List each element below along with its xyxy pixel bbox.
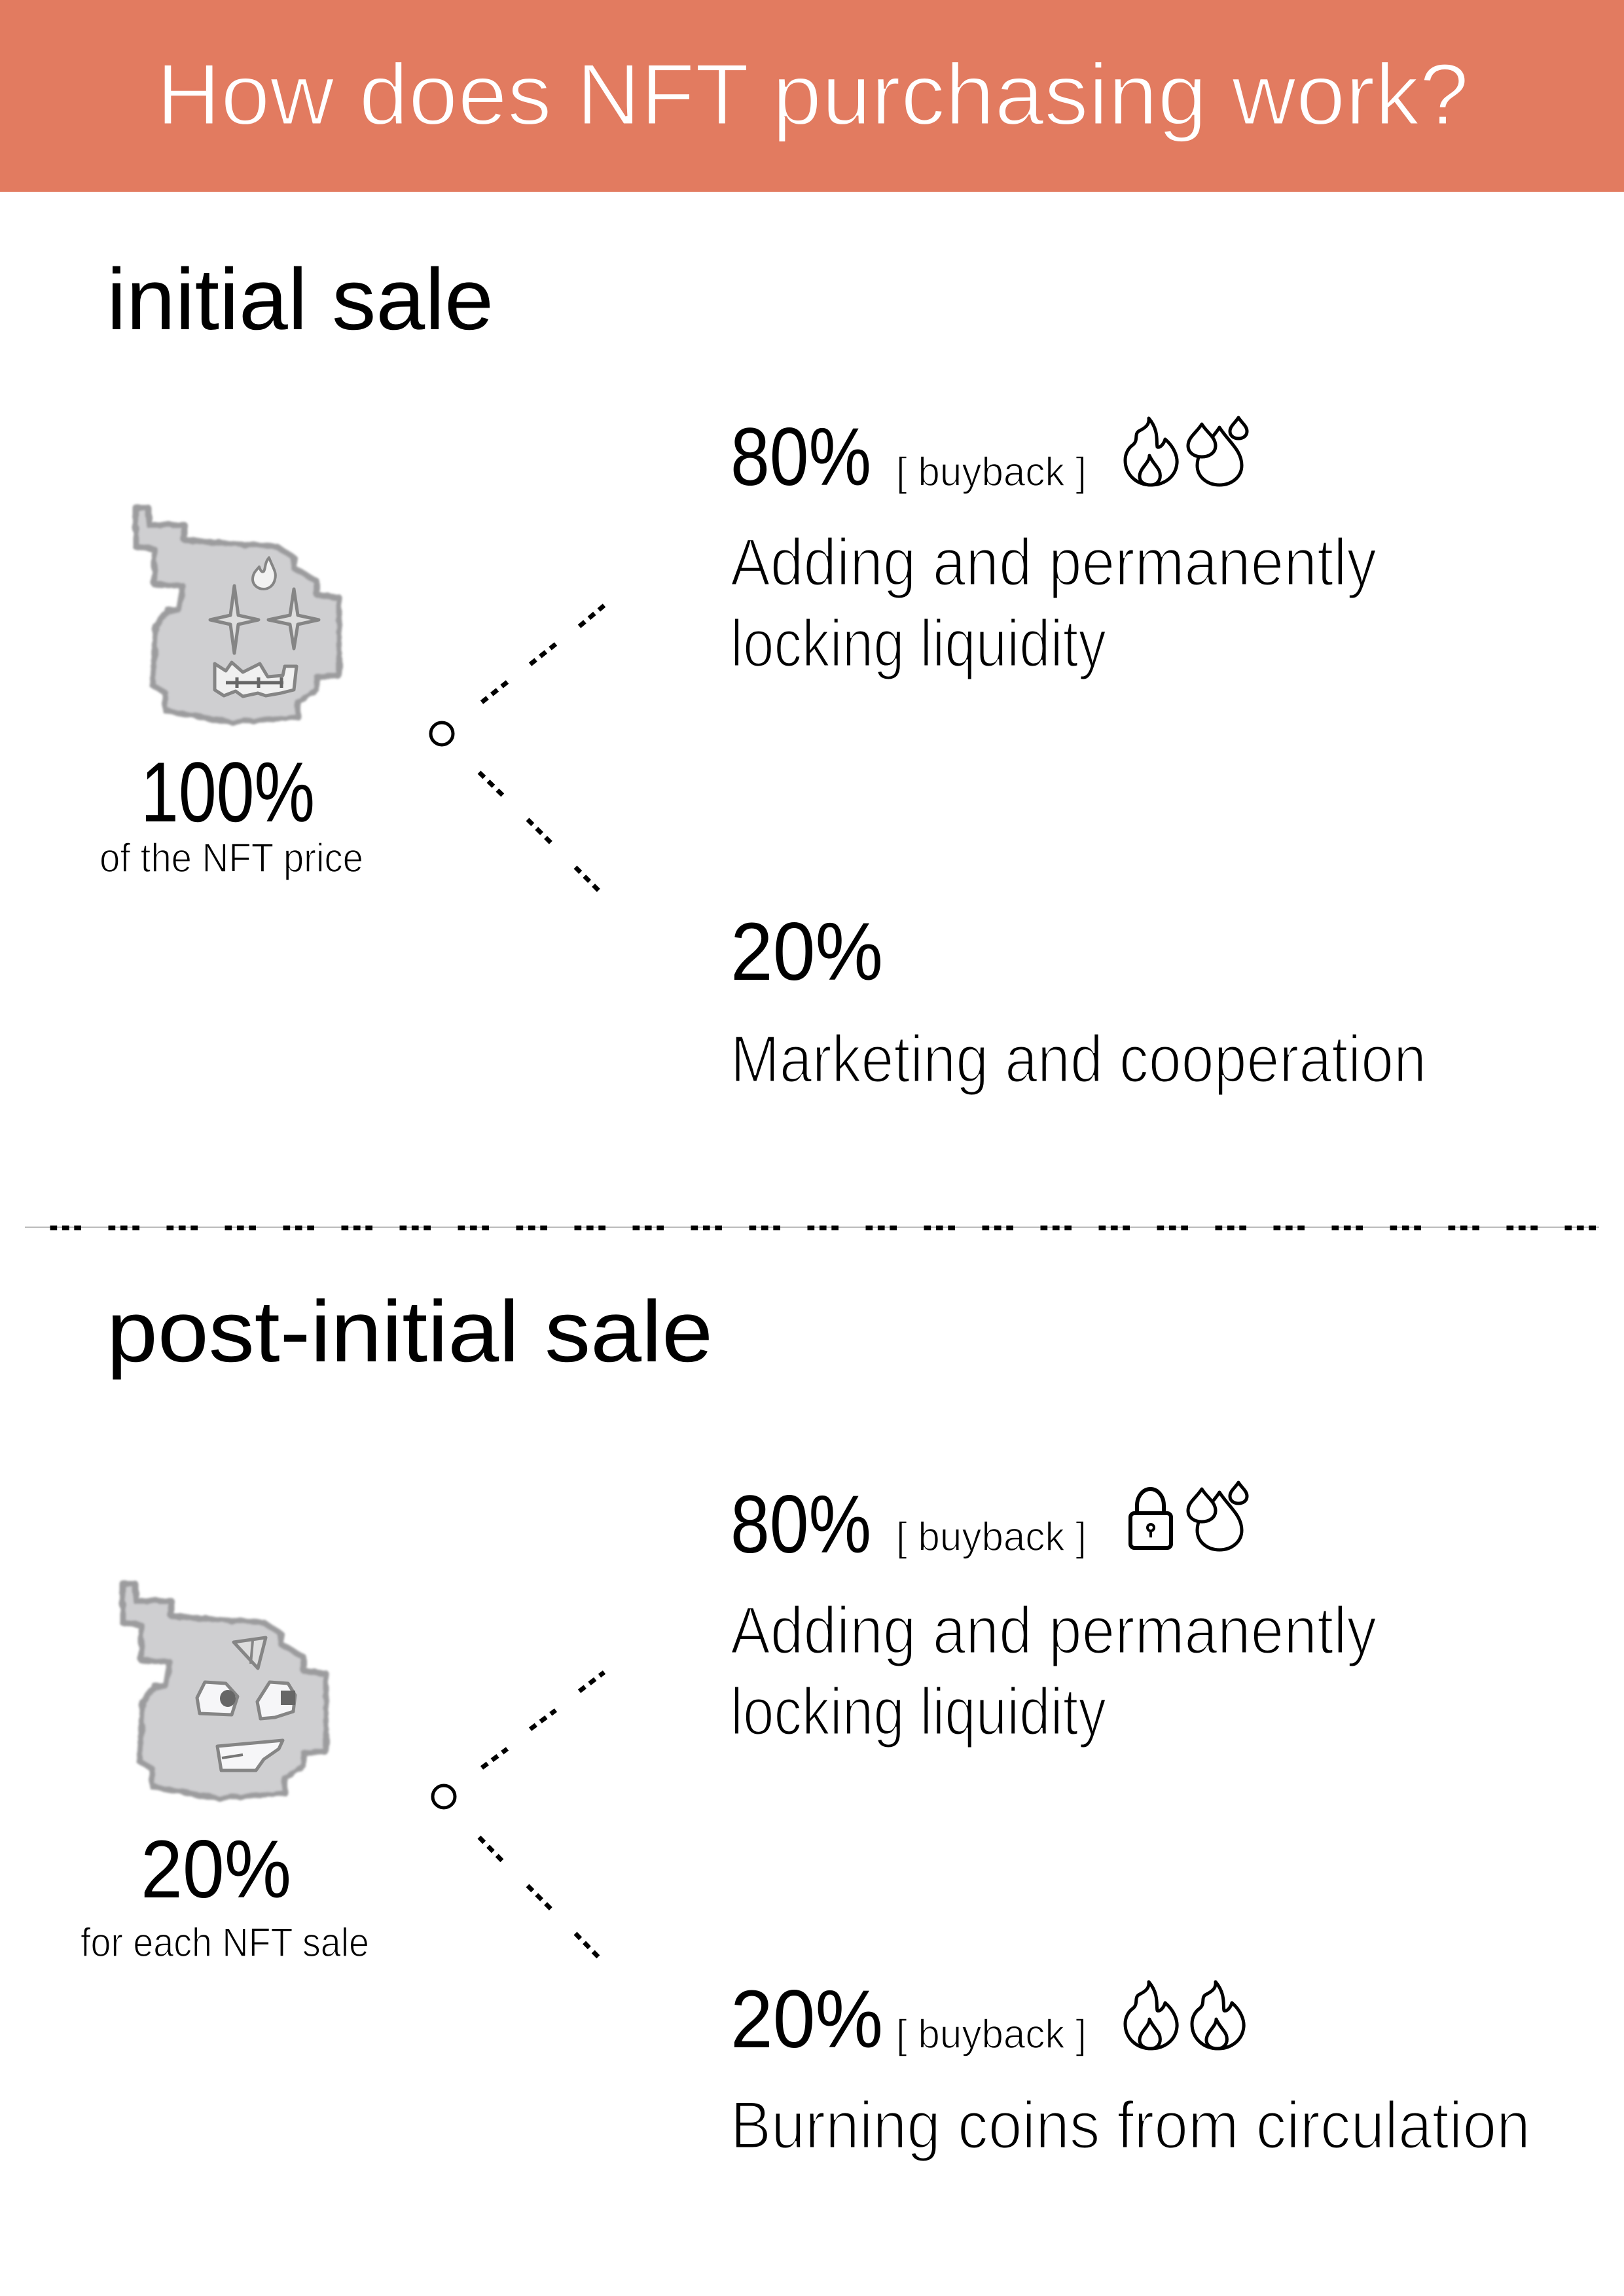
icon: liquidity drops (1188, 418, 1247, 485)
icon: fire (1192, 1982, 1244, 2049)
mascot: sparkle-eyed token (135, 508, 339, 723)
icon: padlock (1130, 1489, 1171, 1548)
description: adding and permanently locking liquidity: Adding and permanently (731, 525, 1377, 600)
mascot: wide-eyed token (122, 1584, 326, 1799)
split connector: initial sale (431, 605, 604, 891)
title: How does NFT purchasing work? (156, 46, 1469, 143)
description: adding and permanently locking liquidity: locking liquidity (731, 606, 1106, 681)
panel: post-initial sale source (81, 1584, 369, 1965)
value: 20%: 20% (731, 1974, 883, 2065)
description: adding and permanently locking liquidity: locking liquidity (731, 1674, 1106, 1749)
caption: for each NFT sale: for each NFT sale (81, 1920, 369, 1965)
value: 80%: 80% (731, 412, 871, 503)
panel: initial sale source (99, 508, 363, 881)
value: 80%: 80% (731, 1479, 871, 1570)
value: 100%: 100% (141, 744, 315, 840)
description: adding and permanently locking liquidity: Adding and permanently (731, 1593, 1377, 1668)
icon: fire (1125, 418, 1177, 485)
heading: initial sale: initial sale (107, 251, 494, 348)
description: marketing and cooperation: Marketing and cooperation (731, 1022, 1426, 1096)
panel: initial sale 20% marketing (731, 906, 1426, 1096)
caption: of the NFT price: of the NFT price (99, 836, 363, 881)
label: buyback: [ buyback ] (896, 2012, 1087, 2057)
description: adding and permanently locking liquidity (731, 525, 1377, 681)
split connector: post-initial sale (433, 1672, 604, 1958)
value: 20%: 20% (731, 906, 883, 997)
description: adding and permanently locking liquidity (731, 1593, 1377, 1749)
value: 20%: 20% (141, 1824, 291, 1915)
heading: post-initial sale: post-initial sale (107, 1283, 713, 1380)
label: buyback: [ buyback ] (896, 450, 1087, 495)
icon: fire (1125, 1982, 1177, 2049)
panel: initial sale 80% buyback (731, 412, 1377, 681)
label: buyback: [ buyback ] (896, 1515, 1087, 1560)
icon: liquidity drops (1188, 1482, 1247, 1550)
panel: post-initial sale 80% buyback (731, 1479, 1377, 1749)
header banner (0, 0, 1624, 192)
description: burning coins from circulation: Burning coins from circulation (731, 2088, 1530, 2162)
panel: post-initial sale 20% burn (731, 1974, 1530, 2162)
